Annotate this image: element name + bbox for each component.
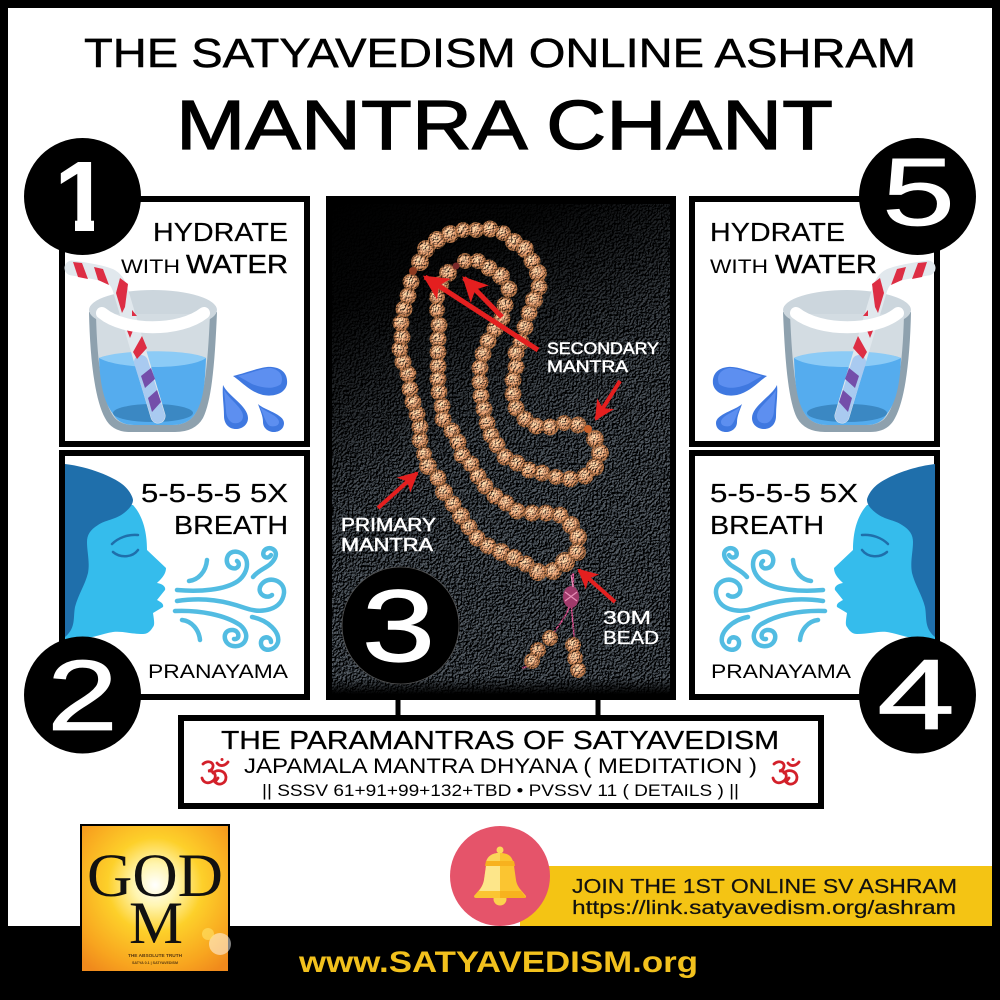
breath right text: BREATH bbox=[710, 510, 824, 540]
label: primary mantra bbox=[341, 515, 436, 555]
icon: face exhaling left bbox=[65, 464, 166, 640]
book cover: god m bbox=[81, 825, 231, 972]
arrow: secondary mantra start bbox=[425, 277, 538, 350]
number badge 2: 2 bbox=[47, 640, 118, 752]
number badge 1 bbox=[24, 138, 141, 255]
panel: hydrate right bbox=[692, 199, 937, 444]
label: 30m bead bbox=[603, 608, 659, 648]
number badge 4 bbox=[859, 636, 976, 754]
banner: join ashram bbox=[520, 866, 992, 926]
arrow: primary mantra bbox=[378, 473, 417, 508]
number badge 2 bbox=[24, 636, 141, 754]
heading: mantra chant: MANTRA CHANT bbox=[176, 86, 833, 164]
breath left text: BREATH bbox=[174, 510, 288, 540]
hydrate left text bbox=[121, 217, 288, 279]
label: 30m bead: 30M bbox=[603, 608, 651, 628]
caption subheading: JAPAMALA MANTRA DHYANA ( MEDITATION ) bbox=[244, 755, 757, 778]
hydrate left text: WITH bbox=[121, 257, 180, 278]
banner text bbox=[572, 875, 957, 919]
panel: hydrate left bbox=[62, 199, 307, 444]
icon: water drops right bbox=[713, 367, 777, 432]
icon: om left bbox=[202, 758, 228, 784]
breath left text bbox=[141, 478, 288, 683]
breath left text: 5-5-5-5 5X bbox=[141, 478, 288, 508]
cover letter: M bbox=[129, 890, 183, 956]
banner text: JOIN THE 1ST ONLINE SV ASHRAM bbox=[572, 875, 957, 898]
arrow: 30m bead bbox=[579, 570, 615, 602]
icon: om right bbox=[773, 758, 799, 784]
hydrate right text: WITH bbox=[710, 257, 768, 278]
website url: www.SATYAVEDISM.org bbox=[298, 946, 698, 979]
icon: wind left bbox=[175, 548, 284, 650]
panel: breath left bbox=[62, 453, 307, 697]
breath left text: PRANAYAMA bbox=[148, 662, 288, 683]
cover author: SATYA 0.1 | SATYAVEDISM bbox=[132, 961, 178, 965]
cover subtitle: THE ABSOLUTE TRUTH bbox=[128, 953, 183, 959]
number badge 5 bbox=[859, 138, 976, 255]
number badge 4: 4 bbox=[877, 639, 955, 751]
panel: breath right bbox=[692, 453, 937, 697]
title: THE SATYAVEDISM ONLINE ASHRAM bbox=[84, 30, 916, 76]
caption heading: THE PARAMANTRAS OF SATYAVEDISM bbox=[221, 725, 779, 755]
icon: glass of water right bbox=[783, 262, 928, 432]
number badge 1: 1 bbox=[54, 141, 110, 253]
arrow: secondary mantra end bbox=[596, 381, 620, 419]
label: primary mantra: MANTRA bbox=[341, 535, 433, 555]
icon: water drops left bbox=[223, 367, 287, 432]
label: 30m bead: BEAD bbox=[603, 628, 659, 648]
hydrate left text: HYDRATE bbox=[153, 217, 288, 247]
arrow: secondary mantra second bbox=[464, 278, 502, 317]
mala beads bbox=[392, 222, 608, 677]
breath right text bbox=[710, 478, 858, 683]
hydrate right text: HYDRATE bbox=[710, 217, 845, 247]
icon: face exhaling right bbox=[834, 464, 935, 640]
number badge 3 bbox=[342, 567, 459, 684]
label: primary mantra: PRIMARY bbox=[341, 515, 436, 535]
footer bar bbox=[0, 926, 1000, 1000]
breath right text: 5-5-5-5 5X bbox=[710, 478, 858, 508]
label: secondary mantra: MANTRA bbox=[547, 358, 628, 376]
panel: paramantras caption bbox=[181, 718, 821, 806]
icon: wind right bbox=[716, 548, 825, 650]
icon: bell bbox=[450, 826, 550, 926]
hydrate right text: WATER bbox=[775, 249, 877, 279]
banner text: https://link.satyavedism.org/ashram bbox=[572, 898, 956, 919]
hydrate right text bbox=[710, 217, 877, 279]
icon: glass of water left bbox=[72, 262, 217, 432]
red marker beads bbox=[409, 262, 592, 433]
hydrate left text: WATER bbox=[186, 249, 288, 279]
title bbox=[84, 30, 916, 164]
caption reference line: || SSSV 61+91+99+132+TBD • PVSSV 11 ( DETAILS ) || bbox=[262, 781, 739, 800]
label: secondary mantra: SECONDARY bbox=[547, 340, 659, 358]
cover title: GOD bbox=[87, 843, 223, 910]
number badge 5: 5 bbox=[882, 139, 955, 246]
connector: right bbox=[596, 700, 600, 716]
breath right text: PRANAYAMA bbox=[711, 662, 851, 683]
label: secondary mantra bbox=[547, 340, 659, 376]
tassel knot bbox=[563, 575, 579, 608]
connector: left bbox=[396, 700, 400, 716]
panel: japamala photo bbox=[326, 196, 676, 700]
number badge 3: 3 bbox=[362, 569, 435, 683]
